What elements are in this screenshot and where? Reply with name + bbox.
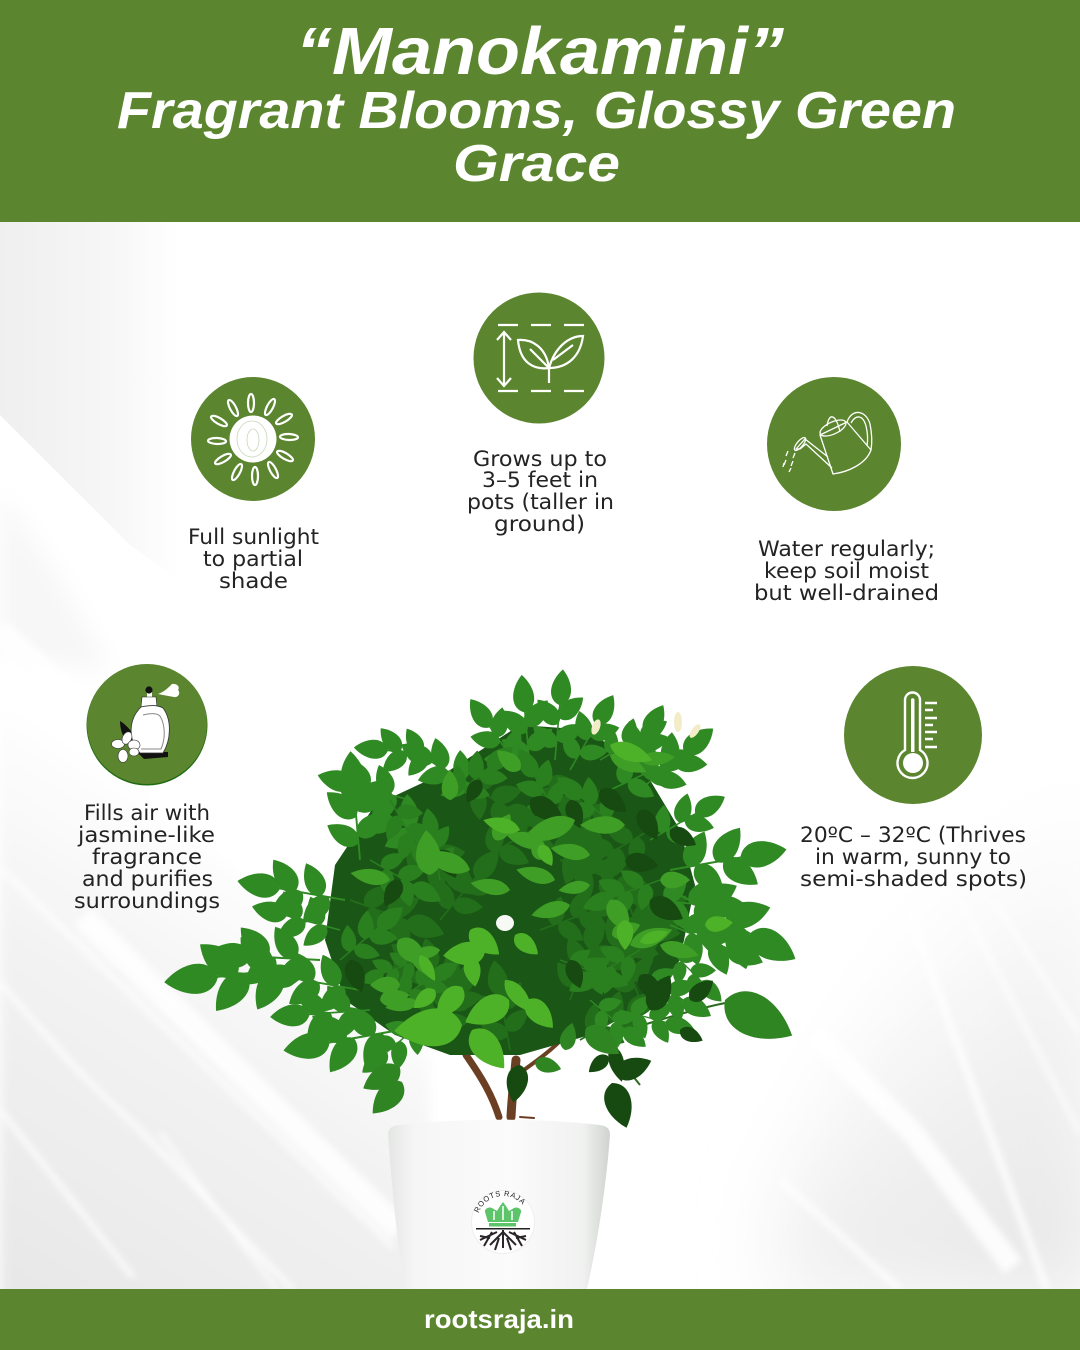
text: watering <box>754 537 939 605</box>
outer medium sprigs <box>160 667 816 1093</box>
large lower leaves <box>358 981 802 1122</box>
gap in foliage <box>496 915 514 931</box>
text: sunlight <box>188 525 319 593</box>
text: temperature: semi-shaded spots) <box>800 867 1027 891</box>
text: fragrance: and purifies <box>82 867 213 891</box>
title: “Manokamini” <box>296 14 785 89</box>
deep medium sprigs <box>339 755 707 1065</box>
pot <box>388 1120 610 1289</box>
text: sunlight: to partial <box>203 547 303 571</box>
text: height: pots (taller in <box>467 490 614 514</box>
text: height: ground) <box>494 512 585 536</box>
text: height <box>467 447 614 536</box>
inner medium sprigs <box>323 727 669 1020</box>
footer band <box>0 1289 1080 1350</box>
icon: perfume bottle <box>86 664 208 786</box>
trunk and branches <box>466 1035 566 1118</box>
text: watering: but well-drained <box>754 581 939 605</box>
text: watering: Water regularly; <box>758 537 935 561</box>
background: white silk streaks <box>0 222 1080 1300</box>
text: watering: keep soil moist <box>764 559 929 583</box>
text: fragrance: fragrance <box>92 845 202 869</box>
icon: plant height <box>474 292 604 424</box>
dark foliage core <box>325 725 695 1055</box>
icon: sun <box>191 377 315 501</box>
plant: jasmine shrub <box>160 667 816 1132</box>
logo sticker <box>471 1190 535 1254</box>
text: fragrance: jasmine-like <box>77 823 215 847</box>
text: temperature: 20ºC – 32ºC (Thrives <box>800 823 1026 847</box>
header band <box>0 0 1080 222</box>
branch to lower right leaves <box>600 1002 730 1085</box>
text: temperature: in warm, sunny to <box>815 845 1011 869</box>
logo sticker: ROOTS RAJA <box>474 1190 524 1213</box>
icon: thermometer <box>844 666 982 804</box>
text: fragrance <box>74 801 220 913</box>
text: fragrance: Fills air with <box>84 801 210 825</box>
very dark leaves <box>341 776 718 1132</box>
footer url: rootsraja.in <box>424 1304 574 1334</box>
text: sunlight: shade <box>219 569 288 593</box>
title: Grace <box>453 135 620 193</box>
text: height: 3–5 feet in <box>482 468 598 492</box>
flower buds <box>590 712 702 740</box>
title <box>117 14 956 193</box>
text: temperature <box>800 823 1027 891</box>
text: height: Grows up to <box>473 447 607 471</box>
icon: watering can <box>767 377 901 511</box>
title: Fragrant Blooms, Glossy Green <box>117 82 956 140</box>
text: sunlight: Full sunlight <box>188 525 319 549</box>
highlight leaves <box>393 737 734 1077</box>
text: fragrance: surroundings <box>74 889 220 913</box>
bright leaves <box>349 744 701 1014</box>
